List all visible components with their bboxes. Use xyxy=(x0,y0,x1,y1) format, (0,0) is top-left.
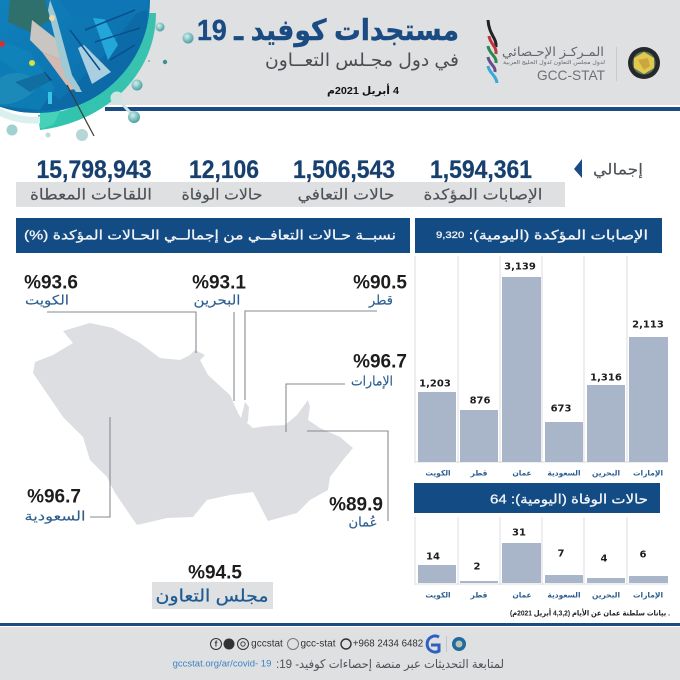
panel heading: daily deaths: حالات الوفاة (اليومية): 64 xyxy=(490,492,648,508)
footnote: . بيانات سلطنة عمان عن الأيام (4,3,2 أبريل 2021م) xyxy=(510,608,670,618)
callout: Kuwait: %93.6 xyxy=(24,272,78,294)
bar chart: daily confirmed cases: 876 xyxy=(470,396,490,406)
footer: +968 2434 6482 xyxy=(353,638,423,650)
bar chart: daily deaths: 31 xyxy=(512,528,526,538)
icon: ribbon xyxy=(488,20,497,83)
bar chart: daily deaths: الإمارات xyxy=(633,590,663,600)
molecules decoration xyxy=(6,22,194,141)
bar chart: daily deaths xyxy=(415,517,668,600)
bar chart: daily confirmed cases: 1,203 xyxy=(419,378,451,390)
bar chart: daily confirmed cases: عمان xyxy=(512,468,532,478)
logo: GCC-STAT xyxy=(488,20,660,83)
callout: Saudi Arabia: %96.7 xyxy=(27,486,81,508)
callout: Bahrain: البحرين xyxy=(194,292,240,308)
date: 4 أبريل 2021م xyxy=(327,83,399,97)
stats band xyxy=(16,182,565,207)
callout: GCC total: %94.5 xyxy=(188,562,242,584)
bar chart: daily deaths: الكويت xyxy=(425,590,451,600)
icons: social media: f xyxy=(215,640,218,648)
bar chart: daily confirmed cases: الكويت xyxy=(425,468,451,478)
bar chart: daily confirmed cases: الإمارات xyxy=(633,468,663,478)
icon: GCC-STAT mark xyxy=(427,636,439,652)
callout: UAE xyxy=(286,352,407,432)
icon: round seal xyxy=(452,637,466,651)
totals label xyxy=(574,159,643,180)
panel heading: daily confirmed cases: الإصابات المؤكدة (اليومية): 9,320 xyxy=(436,228,648,244)
callout: GCC total: مجلس التعاون xyxy=(156,586,268,606)
decorative circular photo with teal ring xyxy=(0,0,160,136)
footer link: gccstat.org/ar/covid- 19 xyxy=(173,658,271,670)
icon: GCC emblem xyxy=(628,47,660,79)
callout: Saudi Arabia xyxy=(24,417,110,524)
header band xyxy=(0,0,680,111)
icon: whatsapp xyxy=(341,639,351,649)
callout: Kuwait xyxy=(24,272,196,353)
bar chart: daily deaths: 4 xyxy=(601,554,608,564)
callout: Oman xyxy=(307,431,388,530)
stat: vaccinations: 15,798,943 xyxy=(36,156,152,184)
totals label: إجمالي xyxy=(593,162,643,180)
bar chart: daily deaths: قطر xyxy=(470,590,488,600)
callout: Oman: عُمان xyxy=(348,514,378,530)
footer: gccstat xyxy=(251,638,283,650)
callout: Oman: %89.9 xyxy=(329,494,383,516)
callout: Kuwait: الكويت xyxy=(25,292,69,308)
callout: UAE: الإمارات xyxy=(351,374,393,390)
bar chart: daily confirmed cases: 2,113 xyxy=(632,320,664,330)
footer: gcc-stat xyxy=(300,638,336,650)
logo: GCC-STAT: المـركـز الإحـصائي xyxy=(502,45,604,60)
stat: recoveries xyxy=(293,156,395,204)
bar chart: daily confirmed cases xyxy=(415,256,668,478)
title: مستجدات كوفيد ـ 19 xyxy=(197,15,459,47)
panel heading: recovery rate xyxy=(16,218,410,253)
subtitle: في دول مجـلس التعــاون xyxy=(265,50,459,71)
logo: GCC-STAT: GCC-STAT xyxy=(537,67,605,83)
bar chart: daily confirmed cases: 1,316 xyxy=(590,372,622,384)
icon: threads handle xyxy=(288,638,298,650)
bar chart: daily deaths: 14 xyxy=(426,552,440,562)
panel heading: daily confirmed cases xyxy=(415,218,662,253)
stat: vaccinations: اللقاحات المعطاة xyxy=(30,186,152,204)
stat: recoveries: حالات التعافي xyxy=(298,186,394,204)
stat: confirmed cases: الإصابات المؤكدة xyxy=(424,186,542,204)
bar chart: daily deaths: 2 xyxy=(474,562,481,572)
callout: Bahrain: %93.1 xyxy=(192,272,246,294)
panel heading: recovery rate: نسبــة حـالات التعافــي من إجمالــي الحـالات المؤكدة (%) xyxy=(24,228,396,244)
logo: GCC-STAT: لدول مجلس التعاون لدول الخليج العربية xyxy=(503,60,605,66)
bar chart: daily deaths: السعودية xyxy=(547,590,581,600)
bar chart: daily deaths: البحرين xyxy=(592,590,620,600)
stat: deaths xyxy=(182,156,262,204)
stat: confirmed cases: 1,594,361 xyxy=(430,156,532,184)
bar chart: daily deaths: عمان xyxy=(512,590,532,600)
map: GCC countries xyxy=(33,323,353,525)
callout: Bahrain xyxy=(192,272,246,401)
stat: deaths: حالات الوفاة xyxy=(182,186,262,204)
stat: deaths: 12,106 xyxy=(189,156,259,184)
callout: Qatar: %90.5 xyxy=(353,272,407,294)
bar chart: daily confirmed cases: السعودية xyxy=(547,468,581,478)
callout: Qatar: قطر xyxy=(368,292,393,308)
panel heading: daily deaths xyxy=(414,483,660,513)
bar chart: daily deaths: 7 xyxy=(558,548,565,560)
bar chart: daily deaths: 6 xyxy=(640,550,647,560)
stat: confirmed cases xyxy=(424,156,542,204)
footer call to action: لمتابعة التحديثات عبر منصة إحصاءات كوفيد- 19: xyxy=(276,657,504,672)
icon: left arrow xyxy=(574,159,582,178)
bar chart: daily confirmed cases: 3,139 xyxy=(504,262,536,272)
stat: recoveries: 1,506,543 xyxy=(293,156,395,184)
callout: GCC total xyxy=(152,562,273,609)
icons: social media xyxy=(210,638,248,650)
callout: Qatar xyxy=(245,272,407,400)
bar chart: daily confirmed cases: البحرين xyxy=(592,468,620,478)
footer xyxy=(0,623,680,680)
stat: vaccinations xyxy=(30,156,152,204)
callout: UAE: %96.7 xyxy=(353,352,407,372)
bar chart: daily confirmed cases: 673 xyxy=(551,404,571,414)
bar chart: daily confirmed cases: قطر xyxy=(470,468,488,478)
icon: needle xyxy=(67,85,94,136)
callout: Saudi Arabia: السعودية xyxy=(24,508,86,524)
